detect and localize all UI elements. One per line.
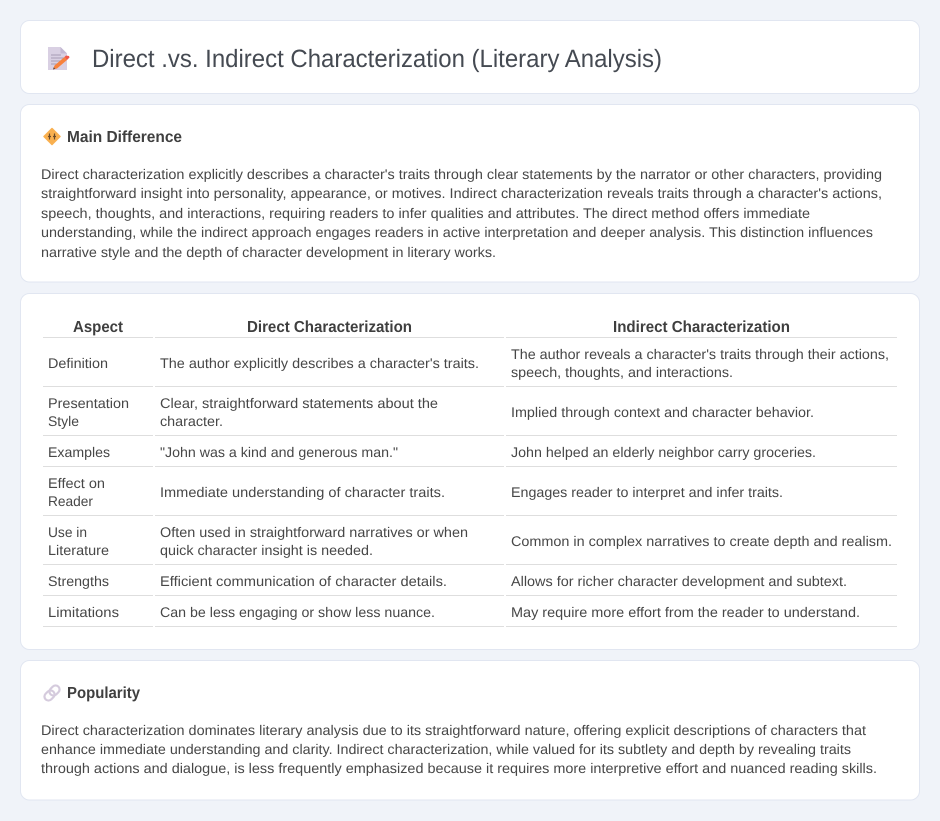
text block: popularity paragraph: enhance immediate understanding and clarity. Indirect characterization, while valued for its subtlety and depth by revealing traits [41, 741, 851, 757]
text block: popularity paragraph: through actions and dialogue, is less frequently emphasized because it requires more interpretive effort and nuanced reading skills. [41, 760, 877, 776]
table header row: Aspect [73, 319, 124, 336]
table row: definition: Definition [48, 355, 108, 371]
table row: use in literature: Common in complex narratives to create depth and realism. [511, 533, 892, 549]
table row: effect on reader: Engages reader to interpret and infer traits. [511, 484, 783, 500]
table row: use in literature: Literature [48, 542, 109, 558]
heading: main difference: Main Difference [67, 129, 182, 146]
text block: main difference paragraph: understanding, while the indirect approach engages readers in active interpretation and deeper analysis. This distinction influences [41, 224, 873, 240]
table row: examples: John helped an elderly neighbor carry groceries. [511, 444, 816, 460]
table row: effect on reader [48, 475, 783, 509]
panel: comparison table [20, 294, 920, 650]
table row: presentation style: Clear, straightforward statements about the [160, 395, 438, 411]
table row: use in literature: Often used in straightforward narratives or when [160, 524, 468, 540]
table row: examples [48, 444, 816, 460]
table row: limitations: Can be less engaging or show less nuance. [160, 604, 435, 620]
table row: effect on reader: Effect on [48, 475, 105, 491]
table row: use in literature [48, 524, 892, 558]
panel: main difference [20, 104, 920, 282]
table row: examples: "John was a kind and generous man." [160, 444, 398, 460]
table row: strengths [48, 573, 847, 589]
heading: popularity: Popularity [67, 685, 140, 702]
text block: main difference paragraph: straightforward insight into personality, appearance, or motives. Indirect characterization reveals traits through a character's actions, [41, 185, 882, 201]
text block: main difference paragraph: speech, thoughts, and interactions, requiring readers to infer qualities and attributes. The direct method offers immediate [41, 205, 810, 221]
text block: popularity paragraph [41, 722, 877, 776]
icon: orange diamond sign [44, 128, 60, 144]
table row: effect on reader: Immediate understanding of character traits. [160, 484, 445, 500]
text block: main difference paragraph: narrative style and the depth of character development in literary works. [41, 244, 496, 260]
table row: presentation style: Implied through context and character behavior. [511, 404, 814, 420]
table row: use in literature: Use in [48, 524, 87, 540]
table row: definition: The author explicitly describes a character's traits. [160, 355, 479, 371]
table row: strengths: Allows for richer character development and subtext. [511, 573, 847, 589]
title: Direct .vs. Indirect Characterization (Literary Analysis) [92, 45, 662, 73]
panel: title header [20, 20, 920, 94]
table row: strengths: Efficient communication of character details. [160, 573, 447, 589]
table row: presentation style [48, 395, 814, 429]
text block: popularity paragraph: Direct characterization dominates literary analysis due to its straightforward nature, offering explicit descriptions of characters that [41, 722, 866, 738]
table row: definition [48, 346, 889, 380]
table header row: Indirect Characterization [613, 319, 790, 336]
table header row [73, 319, 790, 336]
table row: limitations [48, 604, 860, 620]
table row: use in literature: quick character insight is needed. [160, 542, 373, 558]
text block: main difference paragraph [41, 166, 882, 260]
icon: chain link [43, 684, 61, 702]
table row: examples: Examples [48, 444, 110, 460]
panel: popularity [20, 660, 920, 800]
table header row: Direct Characterization [247, 319, 412, 336]
table row: strengths: Strengths [48, 573, 109, 589]
table row: presentation style: Presentation [48, 395, 129, 411]
table row: limitations: Limitations [48, 604, 119, 620]
table row: presentation style: character. [160, 413, 223, 429]
table row: presentation style: Style [48, 413, 79, 429]
table row: definition: The author reveals a character's traits through their actions, [511, 346, 889, 362]
text block: main difference paragraph: Direct characterization explicitly describes a character's traits through clear statements by the narrator or other characters, providing [41, 166, 882, 182]
icon: document with pencil [48, 47, 70, 70]
table row: effect on reader: Reader [48, 493, 93, 509]
table row: definition: speech, thoughts, and interactions. [511, 364, 733, 380]
table row: limitations: May require more effort from the reader to understand. [511, 604, 860, 620]
